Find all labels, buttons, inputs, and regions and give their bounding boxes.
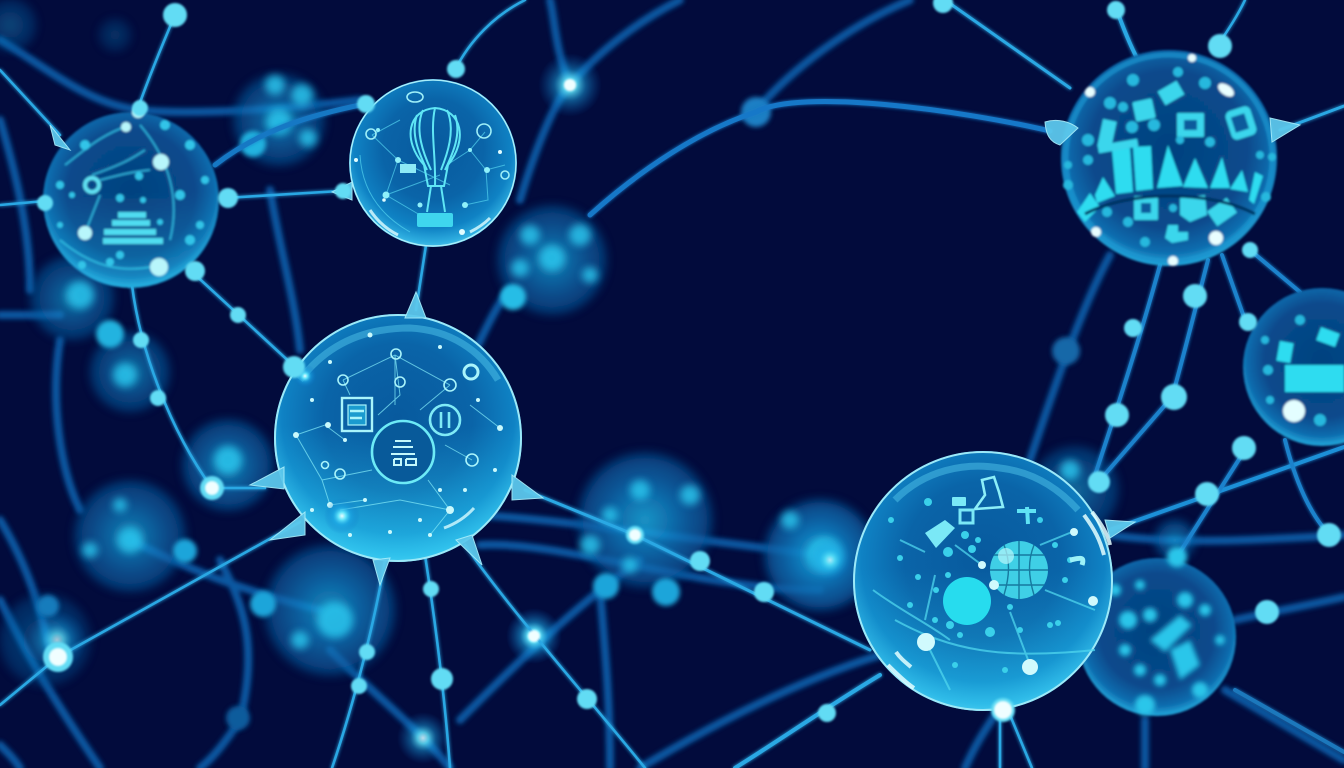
solid disc (943, 577, 991, 625)
upper link to right sphere (590, 102, 1050, 215)
sphere: lower right dim (1078, 547, 1236, 716)
icon: scattered square tiles (1097, 81, 1258, 243)
background sphere inner dots (66, 75, 1080, 649)
sphere: lower right large with globe (853, 451, 1113, 711)
icon: stacked books (103, 212, 163, 244)
sphere: top centre with hot air balloon icon (349, 79, 517, 247)
sphere: central large with icons (274, 314, 522, 562)
sphere: right edge partial (1243, 288, 1344, 446)
icon: temple badge (372, 421, 434, 483)
bright glow node cores (49, 79, 1012, 719)
background blurred spheres (0, 0, 1197, 688)
icon: small outlined nodes (322, 349, 478, 479)
icon: tiles and folded document (925, 497, 973, 548)
background glowing nodes (27, 53, 1080, 764)
sphere joints (50, 118, 1300, 585)
icon: balloon (411, 108, 460, 212)
icon: skyline (1077, 145, 1263, 222)
icon: cross mark (1017, 507, 1036, 524)
sphere: top right with city and icons (1061, 50, 1277, 266)
icon: document (342, 398, 372, 431)
sphere: top left with stacked books icon (43, 106, 219, 288)
icon: globe (990, 541, 1048, 599)
icon: flask (975, 477, 1003, 509)
icon: shield badge (430, 405, 460, 435)
